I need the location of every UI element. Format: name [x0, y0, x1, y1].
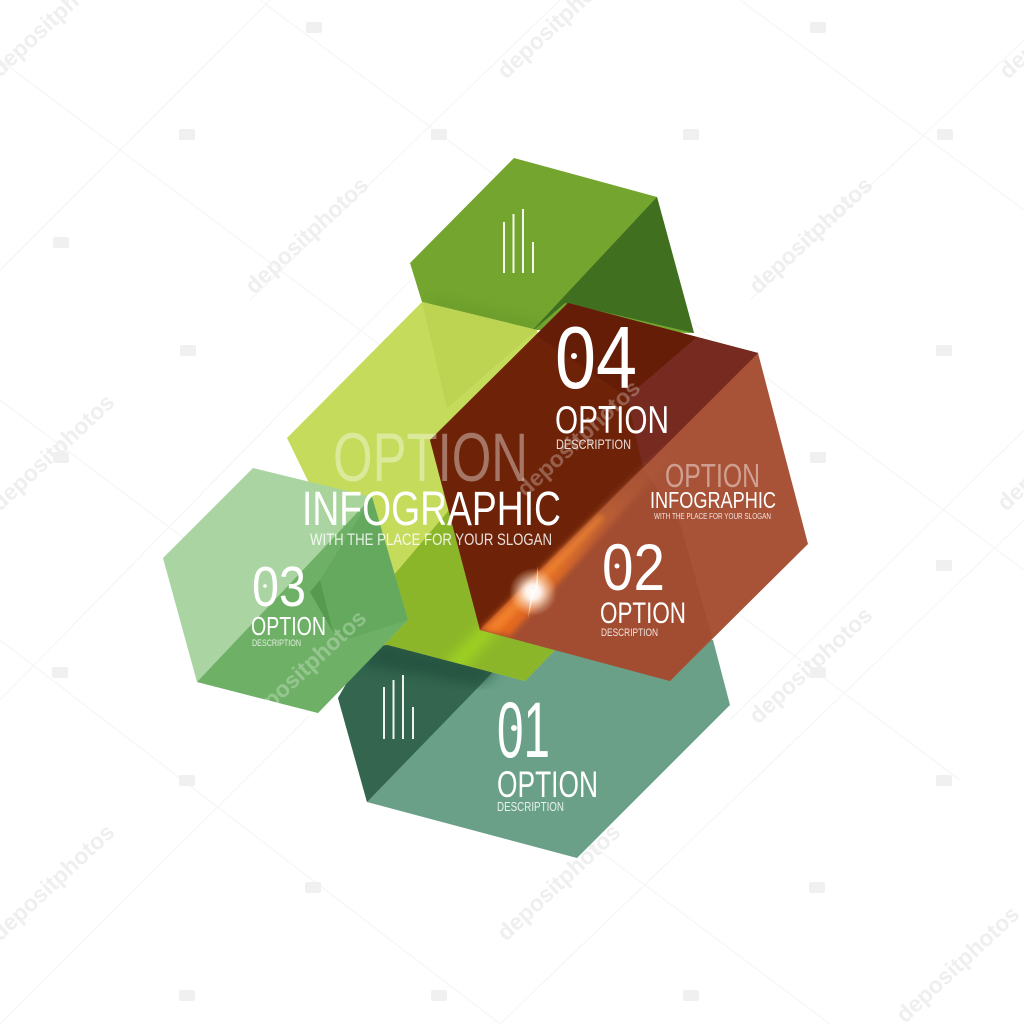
watermark background: depositphotos: [744, 602, 877, 729]
watermark background: depositphotos: [240, 172, 373, 299]
option 02: OPTION: [600, 597, 686, 630]
option 04: OPTION: [555, 399, 669, 442]
panel: lime hexagon: [287, 302, 555, 681]
option 01: [497, 685, 598, 814]
option 02: [600, 530, 686, 639]
option 01: OPTION: [497, 764, 598, 805]
title block: INFOGRAPHIC: [302, 483, 561, 536]
flare: [509, 566, 557, 618]
dark fold of top hexagon: [528, 197, 694, 335]
title block: WITH THE PLACE FOR YOUR SLOGAN: [310, 530, 552, 549]
secondary title block: WITH THE PLACE FOR YOUR SLOGAN: [654, 511, 771, 521]
option 03: DESCRIPTION: [252, 638, 301, 648]
title block: [302, 419, 561, 549]
dark fold of bottom hexagon: [338, 625, 493, 802]
lime upper facet: [422, 302, 537, 408]
option 02: DESCRIPTION: [601, 627, 658, 639]
option 01: 01: [497, 685, 550, 774]
brown top strip: [536, 303, 697, 397]
option 03: 03: [252, 555, 306, 619]
icon: bars top: [503, 209, 534, 273]
option 01: DESCRIPTION: [497, 799, 564, 814]
panel: bottom teal hexagon 01: [338, 625, 730, 858]
option 04: 04: [555, 308, 637, 407]
watermark over panels: [238, 375, 645, 732]
panel: brown hexagon: [430, 303, 808, 681]
watermark over panels: depositphotos: [238, 605, 371, 732]
lower facet: [480, 468, 712, 681]
title block: OPTION: [333, 419, 528, 496]
secondary title block: OPTION: [665, 457, 760, 494]
brown dark diagonal half: [430, 303, 758, 630]
secondary title block: INFOGRAPHIC: [650, 487, 776, 513]
watermark over panels: depositphotos: [512, 375, 645, 502]
option 03: OPTION: [251, 611, 326, 641]
option 04: [555, 308, 669, 452]
watermark background: depositphotos: [492, 819, 625, 946]
lime lower facet: [330, 415, 620, 681]
secondary title block: [650, 457, 776, 521]
watermark background: depositphotos: [744, 172, 877, 299]
option 03: [251, 555, 326, 648]
light streak: [479, 458, 653, 638]
darker half of hexagon 03: [197, 497, 408, 713]
icon: bars bottom: [383, 675, 414, 739]
inner fold: [310, 497, 408, 640]
plum facet: [627, 337, 758, 468]
panel: hexagon 03: [163, 468, 408, 713]
option 02: 02: [602, 530, 665, 604]
panel: top green hexagon: [410, 158, 694, 340]
option 04: DESCRIPTION: [556, 436, 631, 452]
